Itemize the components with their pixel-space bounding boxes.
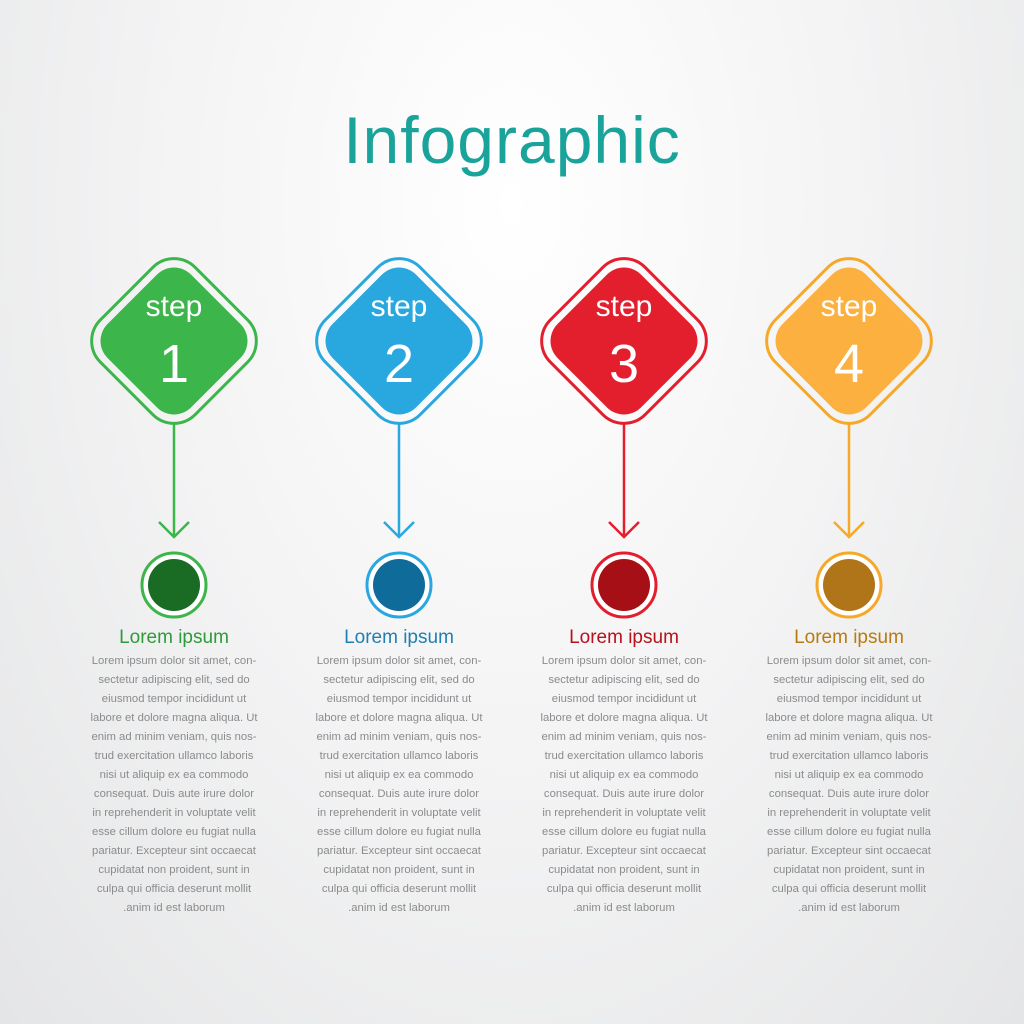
text 1: eiusmod tempor incididunt ut: [102, 693, 246, 705]
step 2: [304, 246, 494, 617]
text 2: esse cillum dolore eu fugiat nulla: [317, 826, 481, 838]
text 4: .anim id est laborum: [798, 902, 900, 914]
step 1: [79, 246, 269, 617]
text 1: Lorem ipsum dolor sit amet, con-: [92, 655, 256, 667]
text 3: culpa qui officia deserunt mollit: [547, 883, 701, 895]
step 3: 3: [609, 334, 639, 394]
step 2: 2: [384, 334, 414, 394]
text 1: enim ad minim veniam, quis nos-: [91, 731, 257, 743]
heading 3: Lorem ipsum: [569, 627, 679, 648]
text 4: Lorem ipsum dolor sit amet, con-: [767, 655, 931, 667]
text 2: [315, 655, 483, 914]
text 2: in reprehenderit in voluptate velit: [317, 807, 481, 819]
step 4: step: [821, 290, 877, 323]
text 2: .anim id est laborum: [348, 902, 450, 914]
text 2: culpa qui officia deserunt mollit: [322, 883, 476, 895]
text 2: sectetur adipiscing elit, sed do: [323, 674, 475, 686]
text 4: sectetur adipiscing elit, sed do: [773, 674, 925, 686]
text 2: consequat. Duis aute irure dolor: [319, 788, 479, 800]
text 1: culpa qui officia deserunt mollit: [97, 883, 251, 895]
step 3: [529, 246, 719, 617]
text 3: [540, 655, 708, 914]
step 2: step: [371, 290, 427, 323]
title: Infographic: [343, 103, 681, 177]
text 4: enim ad minim veniam, quis nos-: [766, 731, 932, 743]
text 2: enim ad minim veniam, quis nos-: [316, 731, 482, 743]
text 2: labore et dolore magna aliqua. Ut: [315, 712, 483, 724]
text 4: labore et dolore magna aliqua. Ut: [765, 712, 933, 724]
text 3: enim ad minim veniam, quis nos-: [541, 731, 707, 743]
text 2: nisi ut aliquip ex ea commodo: [325, 769, 473, 781]
text 1: esse cillum dolore eu fugiat nulla: [92, 826, 256, 838]
text 4: cupidatat non proident, sunt in: [773, 864, 925, 876]
text 3: in reprehenderit in voluptate velit: [542, 807, 706, 819]
text 3: cupidatat non proident, sunt in: [548, 864, 700, 876]
text 1: sectetur adipiscing elit, sed do: [98, 674, 250, 686]
text 4: consequat. Duis aute irure dolor: [769, 788, 929, 800]
text 4: pariatur. Excepteur sint occaecat: [767, 845, 931, 857]
text 4: eiusmod tempor incididunt ut: [777, 693, 921, 705]
heading 2: Lorem ipsum: [344, 627, 454, 648]
text 2: eiusmod tempor incididunt ut: [327, 693, 471, 705]
text 1: in reprehenderit in voluptate velit: [92, 807, 256, 819]
text 1: .anim id est laborum: [123, 902, 225, 914]
text 3: eiusmod tempor incididunt ut: [552, 693, 696, 705]
text 3: esse cillum dolore eu fugiat nulla: [542, 826, 706, 838]
step 4: [754, 246, 944, 617]
step 1: 1: [159, 334, 189, 394]
text 1: pariatur. Excepteur sint occaecat: [92, 845, 256, 857]
text 4: [765, 655, 933, 914]
text 3: Lorem ipsum dolor sit amet, con-: [542, 655, 706, 667]
text 3: pariatur. Excepteur sint occaecat: [542, 845, 706, 857]
text 2: Lorem ipsum dolor sit amet, con-: [317, 655, 481, 667]
text 4: in reprehenderit in voluptate velit: [767, 807, 931, 819]
step 3: step: [596, 290, 652, 323]
text 3: nisi ut aliquip ex ea commodo: [550, 769, 698, 781]
text 2: cupidatat non proident, sunt in: [323, 864, 475, 876]
text 1: consequat. Duis aute irure dolor: [94, 788, 254, 800]
text 3: .anim id est laborum: [573, 902, 675, 914]
text 1: [90, 655, 258, 914]
text 3: consequat. Duis aute irure dolor: [544, 788, 704, 800]
text 4: nisi ut aliquip ex ea commodo: [775, 769, 923, 781]
text 2: pariatur. Excepteur sint occaecat: [317, 845, 481, 857]
text 3: trud exercitation ullamco laboris: [545, 750, 703, 762]
step 1: step: [146, 290, 202, 323]
text 4: culpa qui officia deserunt mollit: [772, 883, 926, 895]
heading 1: Lorem ipsum: [119, 627, 229, 648]
text 3: sectetur adipiscing elit, sed do: [548, 674, 700, 686]
text 1: cupidatat non proident, sunt in: [98, 864, 250, 876]
text 4: esse cillum dolore eu fugiat nulla: [767, 826, 931, 838]
text 3: labore et dolore magna aliqua. Ut: [540, 712, 708, 724]
text 2: trud exercitation ullamco laboris: [320, 750, 478, 762]
text 1: nisi ut aliquip ex ea commodo: [100, 769, 248, 781]
step 4: 4: [834, 334, 864, 394]
text 4: trud exercitation ullamco laboris: [770, 750, 928, 762]
heading 4: Lorem ipsum: [794, 627, 904, 648]
text 1: labore et dolore magna aliqua. Ut: [90, 712, 258, 724]
text 1: trud exercitation ullamco laboris: [95, 750, 253, 762]
